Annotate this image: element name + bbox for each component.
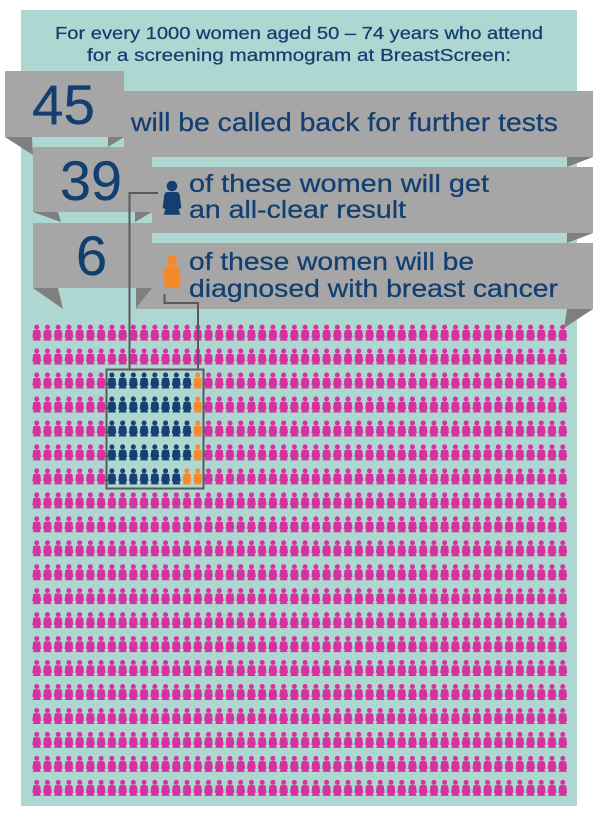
icon array: 1000 women (32, 325, 567, 796)
highlighted block: 45 women called back (106, 370, 204, 488)
number box: 6: 6 (76, 224, 107, 287)
ribbon: called back (124, 91, 593, 167)
text: diagnosed with breast cancer (189, 248, 558, 303)
ribbon: all-clear (152, 167, 593, 243)
number box: 45 (5, 71, 124, 155)
title: for a screening mammogram at BreastScreen: (87, 45, 511, 65)
title (55, 23, 543, 65)
highlight frame (106, 370, 204, 488)
text: all-clear result (189, 170, 489, 224)
ribbon: diagnosed (136, 243, 593, 328)
title: For every 1000 women aged 50 – 74 years who attend (55, 23, 543, 43)
text: all-clear result: of these women will get (189, 170, 489, 198)
number box: 6 (33, 223, 152, 309)
connector: navy icon to block (130, 193, 158, 369)
number box: 45: 45 (32, 73, 95, 136)
icon: orange woman (163, 255, 181, 288)
text: diagnosed with breast cancer: of these women will be (189, 248, 474, 276)
connector: orange icon to block (164, 294, 198, 369)
number box: 39: 39 (60, 149, 122, 212)
text: all-clear result: an all-clear result (189, 196, 406, 224)
text: diagnosed with breast cancer: diagnosed with breast cancer (189, 275, 558, 303)
text: will be called back: will be called back for further tests (130, 107, 558, 137)
icon: navy woman (163, 181, 181, 215)
number box: 39 (33, 147, 152, 222)
